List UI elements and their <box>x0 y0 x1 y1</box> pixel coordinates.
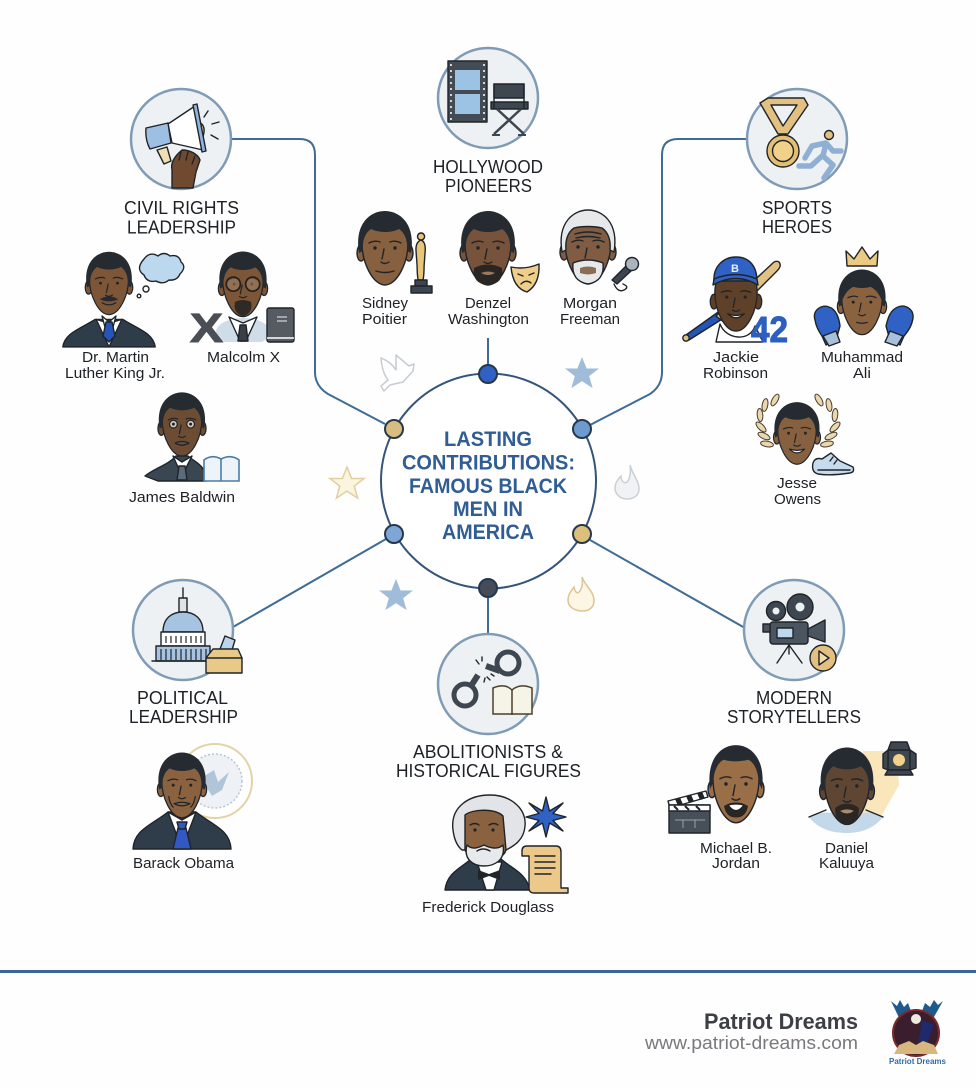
name: Ali <box>853 365 871 382</box>
name: Malcolm X <box>207 349 280 366</box>
heading: POLITICAL <box>137 687 228 708</box>
name: Frederick Douglass <box>422 899 554 916</box>
logo: Patriot Dreams <box>889 1057 947 1066</box>
heading: MODERN <box>756 687 832 708</box>
name: Denzel <box>465 295 511 312</box>
logo <box>889 1000 947 1066</box>
name: Owens <box>774 491 821 508</box>
panel: hollywood pioneers <box>357 48 638 328</box>
connectors <box>232 139 747 634</box>
portrait: Jesse Owens <box>754 393 854 475</box>
portrait: Sidney Poitier <box>357 211 432 293</box>
name <box>448 295 529 328</box>
heading <box>129 687 238 727</box>
name: Luther King Jr. <box>65 365 165 382</box>
portrait: Barack Obama <box>133 744 252 849</box>
hub title: AMERICA <box>442 520 534 544</box>
hub title: FAMOUS BLACK <box>409 474 567 498</box>
name <box>700 840 772 872</box>
name: Kaluuya <box>819 855 875 872</box>
portrait: Daniel Kaluuya <box>809 742 916 833</box>
portrait: Morgan Freeman <box>560 210 638 291</box>
icon: scroll <box>522 846 568 893</box>
number 42: 42 <box>751 309 788 350</box>
hub nodes <box>385 365 591 597</box>
central hub <box>381 365 596 597</box>
footer <box>644 1000 947 1066</box>
icon: capitol and ballot box <box>133 580 242 680</box>
name <box>819 840 875 872</box>
portrait: Denzel Washington <box>460 211 539 292</box>
name: James Baldwin <box>129 489 235 506</box>
heading <box>762 197 832 237</box>
panel: abolitionists and historical figures <box>396 634 581 916</box>
hub title: MEN IN <box>453 497 523 521</box>
name: Sidney <box>362 295 408 312</box>
footer divider <box>0 970 976 973</box>
icon: megaphone and fist <box>131 89 231 189</box>
portrait: Muhammad Ali <box>814 247 913 346</box>
name <box>362 295 408 328</box>
portrait: Michael B. Jordan <box>668 745 764 833</box>
heading <box>727 687 861 727</box>
hub title: LASTING <box>444 427 532 451</box>
heading: STORYTELLERS <box>727 706 861 727</box>
icon: broken shackles and book <box>438 634 538 734</box>
heading: HISTORICAL FIGURES <box>396 760 581 781</box>
name <box>774 475 821 508</box>
name <box>65 349 165 382</box>
name: Freeman <box>560 311 620 328</box>
name: Washington <box>448 311 529 328</box>
name: Morgan <box>563 295 617 312</box>
icon: medal and runner <box>747 89 847 189</box>
heading: HEROES <box>762 216 832 237</box>
presidential seal <box>178 744 252 818</box>
portrait: Jackie Robinson <box>683 257 788 350</box>
panel: political leadership <box>129 580 252 872</box>
hub title <box>402 427 575 544</box>
heading <box>396 741 581 781</box>
portrait: Martin Luther King Jr. <box>63 252 184 347</box>
icon: film strip and director chair <box>438 48 538 148</box>
icon: spotlight <box>883 742 916 775</box>
panel: civil rights leadership <box>63 89 294 506</box>
hub title: CONTRIBUTIONS: <box>402 450 575 474</box>
name: Jesse <box>777 475 817 492</box>
heading: HOLLYWOOD <box>433 156 543 177</box>
name: Poitier <box>362 311 407 328</box>
name: Daniel <box>825 840 868 857</box>
portrait: James Baldwin <box>145 392 239 481</box>
portrait: Malcolm X <box>190 252 294 351</box>
name <box>703 349 768 382</box>
panel: sports heroes <box>683 89 913 508</box>
panel: modern storytellers <box>668 580 916 872</box>
icon: book <box>267 308 294 342</box>
website: www.patriot-dreams.com <box>644 1033 858 1053</box>
brand name: Patriot Dreams <box>704 1009 858 1034</box>
name: Michael B. <box>700 840 772 857</box>
portrait: Frederick Douglass <box>445 795 568 893</box>
heading: SPORTS <box>762 197 832 218</box>
icon: film camera and play button <box>744 580 844 680</box>
name: Jackie <box>713 349 759 366</box>
heading: ABOLITIONISTS & <box>413 741 564 762</box>
name <box>821 349 903 382</box>
name: Barack Obama <box>133 855 235 872</box>
name: Dr. Martin <box>82 349 149 366</box>
name: Muhammad <box>821 349 903 366</box>
heading: LEADERSHIP <box>127 216 236 238</box>
name: Jordan <box>712 855 760 872</box>
heading: PIONEERS <box>445 175 532 196</box>
letter B on cap: B <box>731 263 739 275</box>
decorative symbols <box>330 355 639 611</box>
name <box>560 295 620 328</box>
heading <box>433 156 543 196</box>
name: Robinson <box>703 365 768 382</box>
letter X: X <box>190 305 223 351</box>
heading: LEADERSHIP <box>129 706 238 727</box>
heading: CIVIL RIGHTS <box>124 197 239 218</box>
icon: north star <box>526 797 566 837</box>
heading <box>124 197 239 238</box>
